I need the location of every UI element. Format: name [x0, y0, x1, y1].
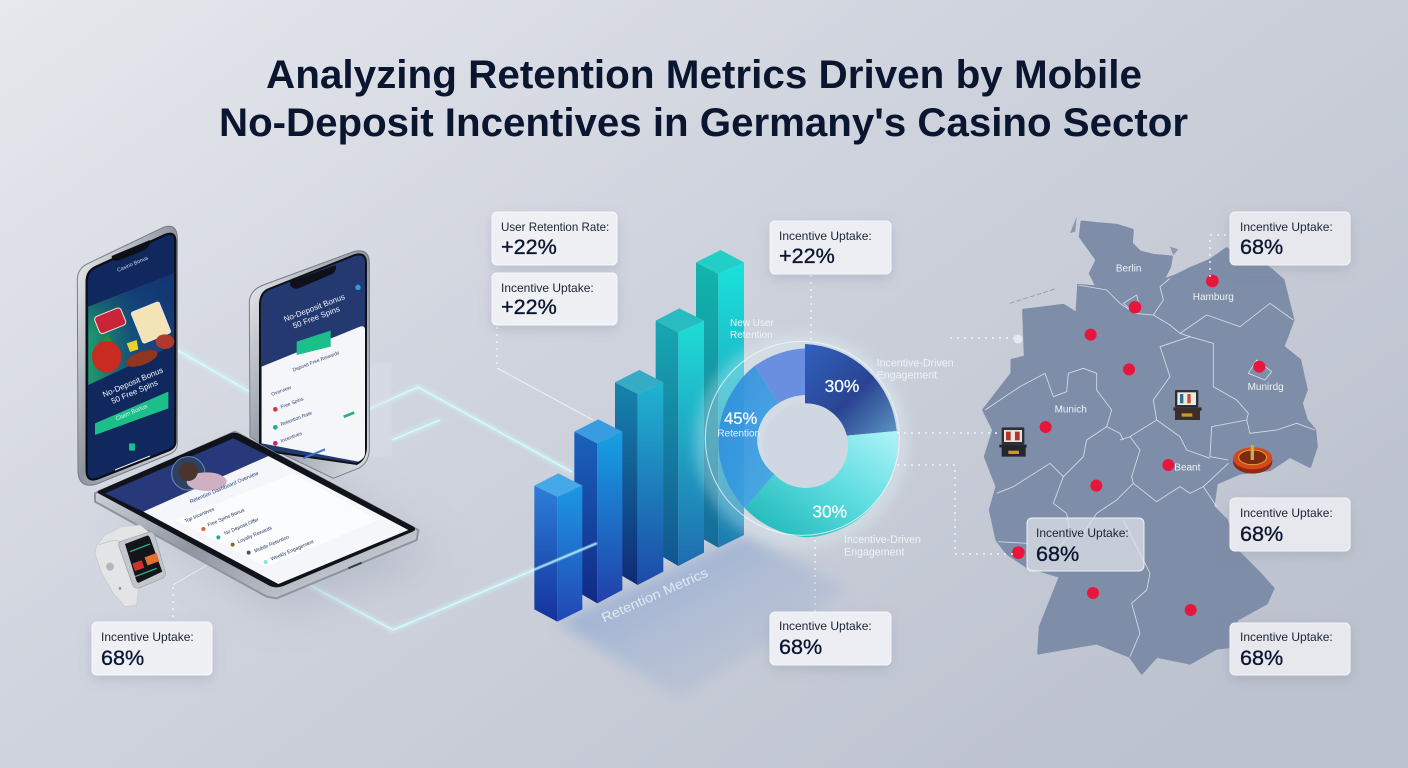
callout: user retention rate: +22% [501, 234, 557, 259]
callout: map translucent [1027, 518, 1144, 571]
outer ring [705, 341, 899, 535]
bar 1 [534, 473, 582, 622]
callout: incentive uptake bottom: Incentive Uptake: [779, 619, 872, 633]
phone: right: No-Deposit Bonus [282, 292, 346, 324]
callout: map bottom: Incentive Uptake: [1240, 630, 1333, 644]
phone: left [77, 226, 177, 485]
callout: map middle [1230, 498, 1350, 551]
state borders [985, 278, 1315, 657]
chart label: Retention Metrics [599, 565, 711, 625]
city labels: Beant [1174, 462, 1201, 473]
callout: watch: Incentive Uptake: [101, 630, 194, 644]
segment: blue [718, 366, 778, 508]
donut labels: Engagement [844, 546, 904, 558]
callout: map top: 68% [1240, 234, 1283, 259]
callout: user retention rate: User Retention Rate: [501, 221, 609, 234]
donut labels [717, 318, 954, 558]
tablet: No Deposit Offer [223, 517, 260, 537]
callout: user retention rate [492, 212, 617, 265]
callout: incentive uptake top [770, 221, 891, 274]
callout: map top: Incentive Uptake: [1240, 220, 1333, 234]
segment: periwinkle [755, 348, 805, 403]
callout: incentive uptake left: +22% [501, 294, 557, 319]
callout: map middle: Incentive Uptake: [1240, 506, 1333, 520]
glow halo [694, 334, 909, 549]
icon: slot machine centre [1173, 390, 1202, 420]
phone: right [249, 251, 392, 478]
city labels: Munich [1055, 405, 1087, 416]
tablet: Loyalty Rewards [237, 525, 273, 545]
islands [1010, 217, 1178, 303]
callout: incentive uptake bottom: 68% [779, 634, 822, 659]
smartwatch [95, 525, 166, 607]
title: No-Deposit Incentives in Germany's Casino Sector [219, 101, 1188, 145]
phone: left: Claim Bonus [115, 404, 149, 423]
callout: watch [92, 622, 212, 675]
title: Analyzing Retention Metrics Driven by Mobile [266, 53, 1142, 97]
devices [77, 226, 418, 598]
city labels: Munirdg [1248, 382, 1284, 393]
phone: right: Incentives [280, 431, 303, 445]
callout: incentive uptake top: +22% [779, 243, 835, 268]
donut values [724, 376, 859, 521]
tablet: Mobile Retention [253, 534, 290, 555]
donut values: 45% [724, 409, 758, 428]
callout: incentive uptake left [492, 273, 617, 325]
marker node [1014, 334, 1022, 344]
phone: right: Deposit Free Rewards [292, 350, 341, 374]
callout: map bottom [1230, 623, 1350, 675]
phone: right: Overview [271, 385, 292, 398]
floor shadow [557, 535, 850, 700]
city labels: Berlin [1116, 264, 1141, 275]
bar 4 [656, 308, 704, 566]
callout: map top [1230, 212, 1350, 265]
donut chart [694, 318, 954, 558]
tablet: Top Incentives [184, 506, 216, 525]
city labels: Hamburg [1193, 292, 1234, 303]
donut values: 30% [812, 501, 847, 521]
phone: right: Free Spins [280, 396, 305, 411]
icon: roulette wheel [1233, 445, 1272, 474]
segment: teal [745, 431, 897, 537]
callout: incentive uptake top: Incentive Uptake: [779, 229, 872, 243]
phone: left: Casino Bonus [116, 255, 150, 274]
chart: retention bars and donut [533, 250, 954, 625]
donut labels: Engagement [877, 369, 937, 381]
callout: incentive uptake bottom [770, 612, 891, 665]
donut labels: Retention [717, 428, 760, 439]
bar 3 [615, 370, 663, 585]
phone: right: 50 Free Spins [291, 304, 341, 331]
tablet [95, 432, 418, 598]
donut labels: Incentive-Driven [877, 357, 954, 369]
tablet: Free Spins Bonus [207, 507, 246, 529]
title [219, 53, 1188, 145]
phone: left: 50 Free Spins [110, 378, 159, 406]
dotted connectors [173, 235, 1230, 620]
callout: map bottom: 68% [1240, 645, 1283, 670]
centre hole [763, 403, 848, 488]
city labels [1055, 264, 1284, 473]
donut labels: New User [730, 318, 775, 329]
device shadow [120, 470, 440, 610]
donut labels: Retention [730, 330, 773, 341]
callout: map middle: 68% [1240, 521, 1283, 546]
phone: left: No-Deposit Bonus [101, 366, 164, 399]
light beam across bars [533, 543, 597, 570]
tablet: Retention Dashboard Overview [189, 471, 260, 505]
callout: incentive uptake left: Incentive Uptake: [501, 281, 594, 295]
map: Germany [983, 217, 1317, 673]
callout: map translucent: Incentive Uptake: [1036, 526, 1129, 540]
callout: map translucent: 68% [1036, 541, 1079, 566]
glowing connector lines [172, 347, 597, 630]
bar 5 [696, 250, 744, 548]
callout: watch: 68% [101, 645, 144, 670]
map silhouette [983, 222, 1317, 673]
donut values: 30% [825, 376, 859, 396]
thin connector [173, 368, 593, 585]
phone: right: Retention Rate [280, 410, 313, 428]
bar 2 [574, 419, 622, 603]
segment: dark blue [805, 344, 897, 436]
icon: slot machine west [999, 427, 1027, 457]
tablet: Weekly Engagement [270, 539, 315, 563]
donut labels: Incentive-Driven [844, 534, 921, 546]
red location markers [1012, 275, 1265, 616]
